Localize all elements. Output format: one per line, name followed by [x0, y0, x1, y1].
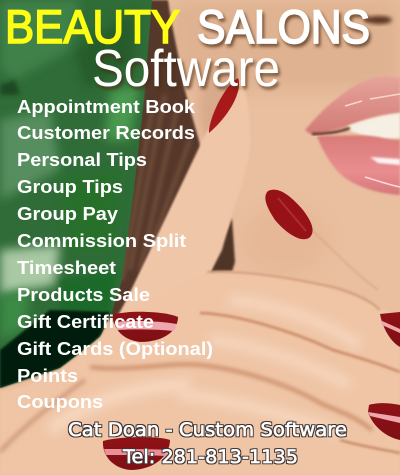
contact: telephone: Tel: 281-813-1135	[122, 446, 298, 468]
nail: raised finger tip	[209, 78, 239, 133]
nail: lower right with stripe	[368, 403, 400, 440]
photo: face shading	[170, 0, 400, 275]
photo: upper lip	[305, 77, 400, 134]
feature list: Customer Records	[17, 123, 195, 143]
nail: left with stripe	[113, 312, 178, 342]
feature list: Coupons	[17, 392, 103, 412]
contact: company name: Cat Doan - Custom Software	[68, 419, 347, 441]
feature list: Gift Certificate	[17, 312, 154, 332]
photo: mouth corner shadow	[312, 128, 350, 134]
feature list: Points	[17, 366, 78, 386]
feature list: Group Pay	[17, 204, 118, 224]
feature list	[17, 97, 213, 412]
photo: lower lip	[317, 135, 400, 195]
feature list: Appointment Book	[17, 97, 196, 117]
photo: teeth	[348, 113, 400, 138]
nail: top right with stripe	[380, 312, 400, 347]
title: SALONS: SALONS	[197, 0, 370, 53]
nail: bottom with stripe	[103, 437, 170, 470]
photo: hair	[100, 0, 235, 325]
photo: hand and fingers	[0, 220, 400, 475]
title: BEAUTY: BEAUTY	[5, 0, 180, 53]
feature list: Commission Split	[17, 231, 186, 251]
photo: raised finger	[118, 82, 250, 320]
photo: green foliage	[0, 0, 152, 388]
feature list: Group Tips	[17, 177, 123, 197]
feature list: Products Sale	[17, 285, 150, 305]
feature list: Timesheet	[17, 258, 116, 278]
feature list: Gift Cards (Optional)	[17, 339, 213, 359]
title: Software: Software	[92, 40, 280, 98]
nail: middle	[265, 190, 313, 239]
feature list: Personal Tips	[17, 150, 147, 170]
